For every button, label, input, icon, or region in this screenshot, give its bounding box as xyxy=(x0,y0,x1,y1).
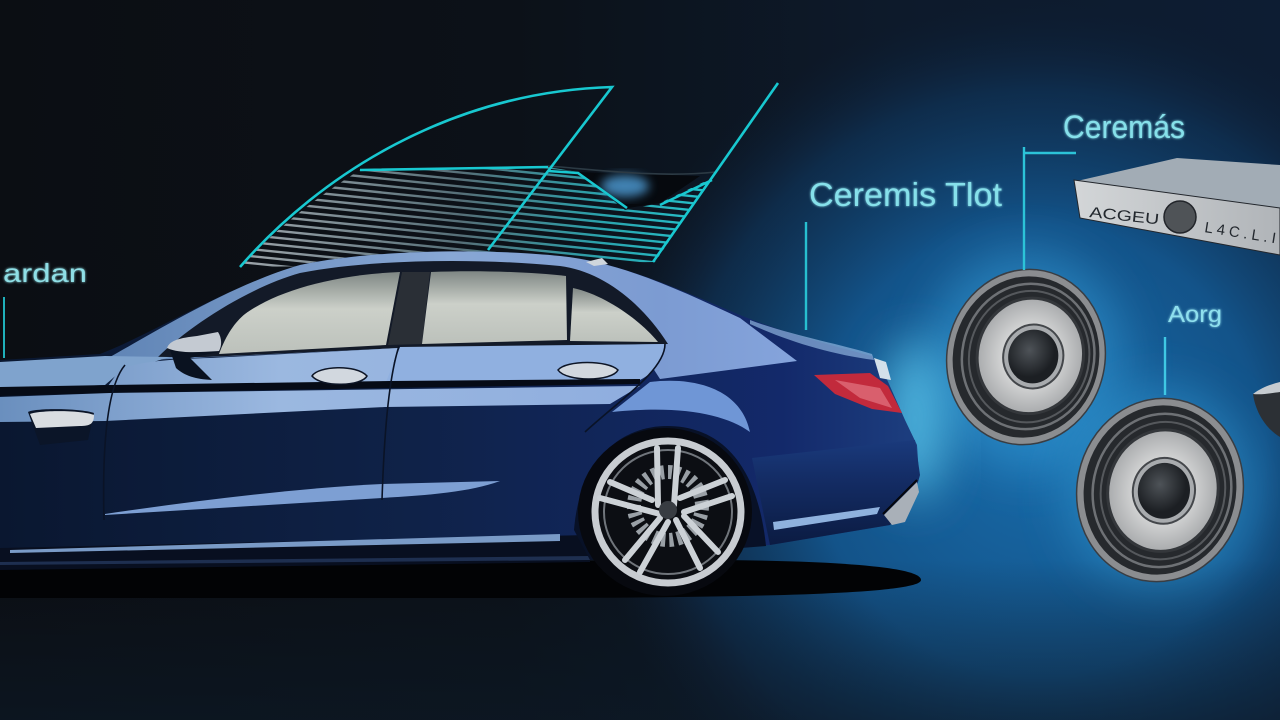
leader line xyxy=(1164,337,1166,395)
hatched glass lines xyxy=(244,167,706,267)
rear door upper panel xyxy=(386,344,664,382)
windshield wireframe diagram xyxy=(239,82,779,268)
lower rocker xyxy=(0,535,590,570)
door handle: middle xyxy=(312,368,367,384)
lower door highlight xyxy=(105,481,500,515)
reflection eye xyxy=(575,172,700,208)
label: Ceremas xyxy=(1024,109,1185,270)
rear wheel xyxy=(578,428,752,596)
amp knob xyxy=(1164,201,1196,233)
ground shadow xyxy=(0,560,921,598)
amp label left: ACGEU xyxy=(1089,204,1160,228)
roof rim and C-pillar panel xyxy=(108,251,797,379)
label: Aorg: Aorg xyxy=(1168,301,1222,327)
side mirror xyxy=(167,332,221,380)
rear haunch highlight xyxy=(612,381,750,432)
front door upper panel xyxy=(108,348,398,386)
leader line xyxy=(3,297,5,358)
bumper with crease xyxy=(752,440,920,545)
leader line xyxy=(805,222,807,330)
wireframe outlines xyxy=(240,83,778,267)
amp front xyxy=(1074,180,1280,255)
leader line xyxy=(1024,147,1076,270)
label: Ceremis Tlot: Ceremis Tlot xyxy=(809,176,1002,213)
quarter window xyxy=(570,288,658,342)
amp top xyxy=(1077,158,1280,208)
label: ardan xyxy=(3,258,87,358)
shoulder light band xyxy=(0,386,640,422)
door seams xyxy=(104,344,665,520)
label: ardan: ardan xyxy=(3,258,87,288)
door handle: front xyxy=(28,409,94,445)
partial speaker at right edge xyxy=(1253,382,1280,437)
door handle: rear xyxy=(558,362,618,379)
bumper highlight xyxy=(773,507,880,530)
hood panel xyxy=(0,356,170,390)
brake disc xyxy=(634,472,702,540)
rim xyxy=(595,441,741,583)
wheel arch xyxy=(574,426,766,560)
tail light xyxy=(814,373,902,413)
car xyxy=(0,251,920,570)
roof antenna xyxy=(586,258,608,266)
front window xyxy=(219,272,400,354)
rear chrome xyxy=(874,358,891,380)
B pillar reflection xyxy=(388,272,430,345)
speaker: upper xyxy=(930,254,1122,460)
label: Aorg xyxy=(1165,301,1222,395)
amp label right: L4C.L.I xyxy=(1203,219,1277,247)
car body xyxy=(0,251,919,568)
rear window xyxy=(422,271,567,344)
spokes xyxy=(600,448,732,572)
amplifier box xyxy=(1074,158,1280,255)
tyre xyxy=(578,428,752,596)
rear deck soft highlight xyxy=(750,320,874,360)
exhaust xyxy=(884,482,919,525)
label: Ceremas: Ceremás xyxy=(1063,109,1185,145)
window surround xyxy=(158,261,668,357)
sill stripe xyxy=(10,534,560,553)
speaker: lower xyxy=(1060,383,1260,597)
body crease dark line xyxy=(0,379,640,396)
